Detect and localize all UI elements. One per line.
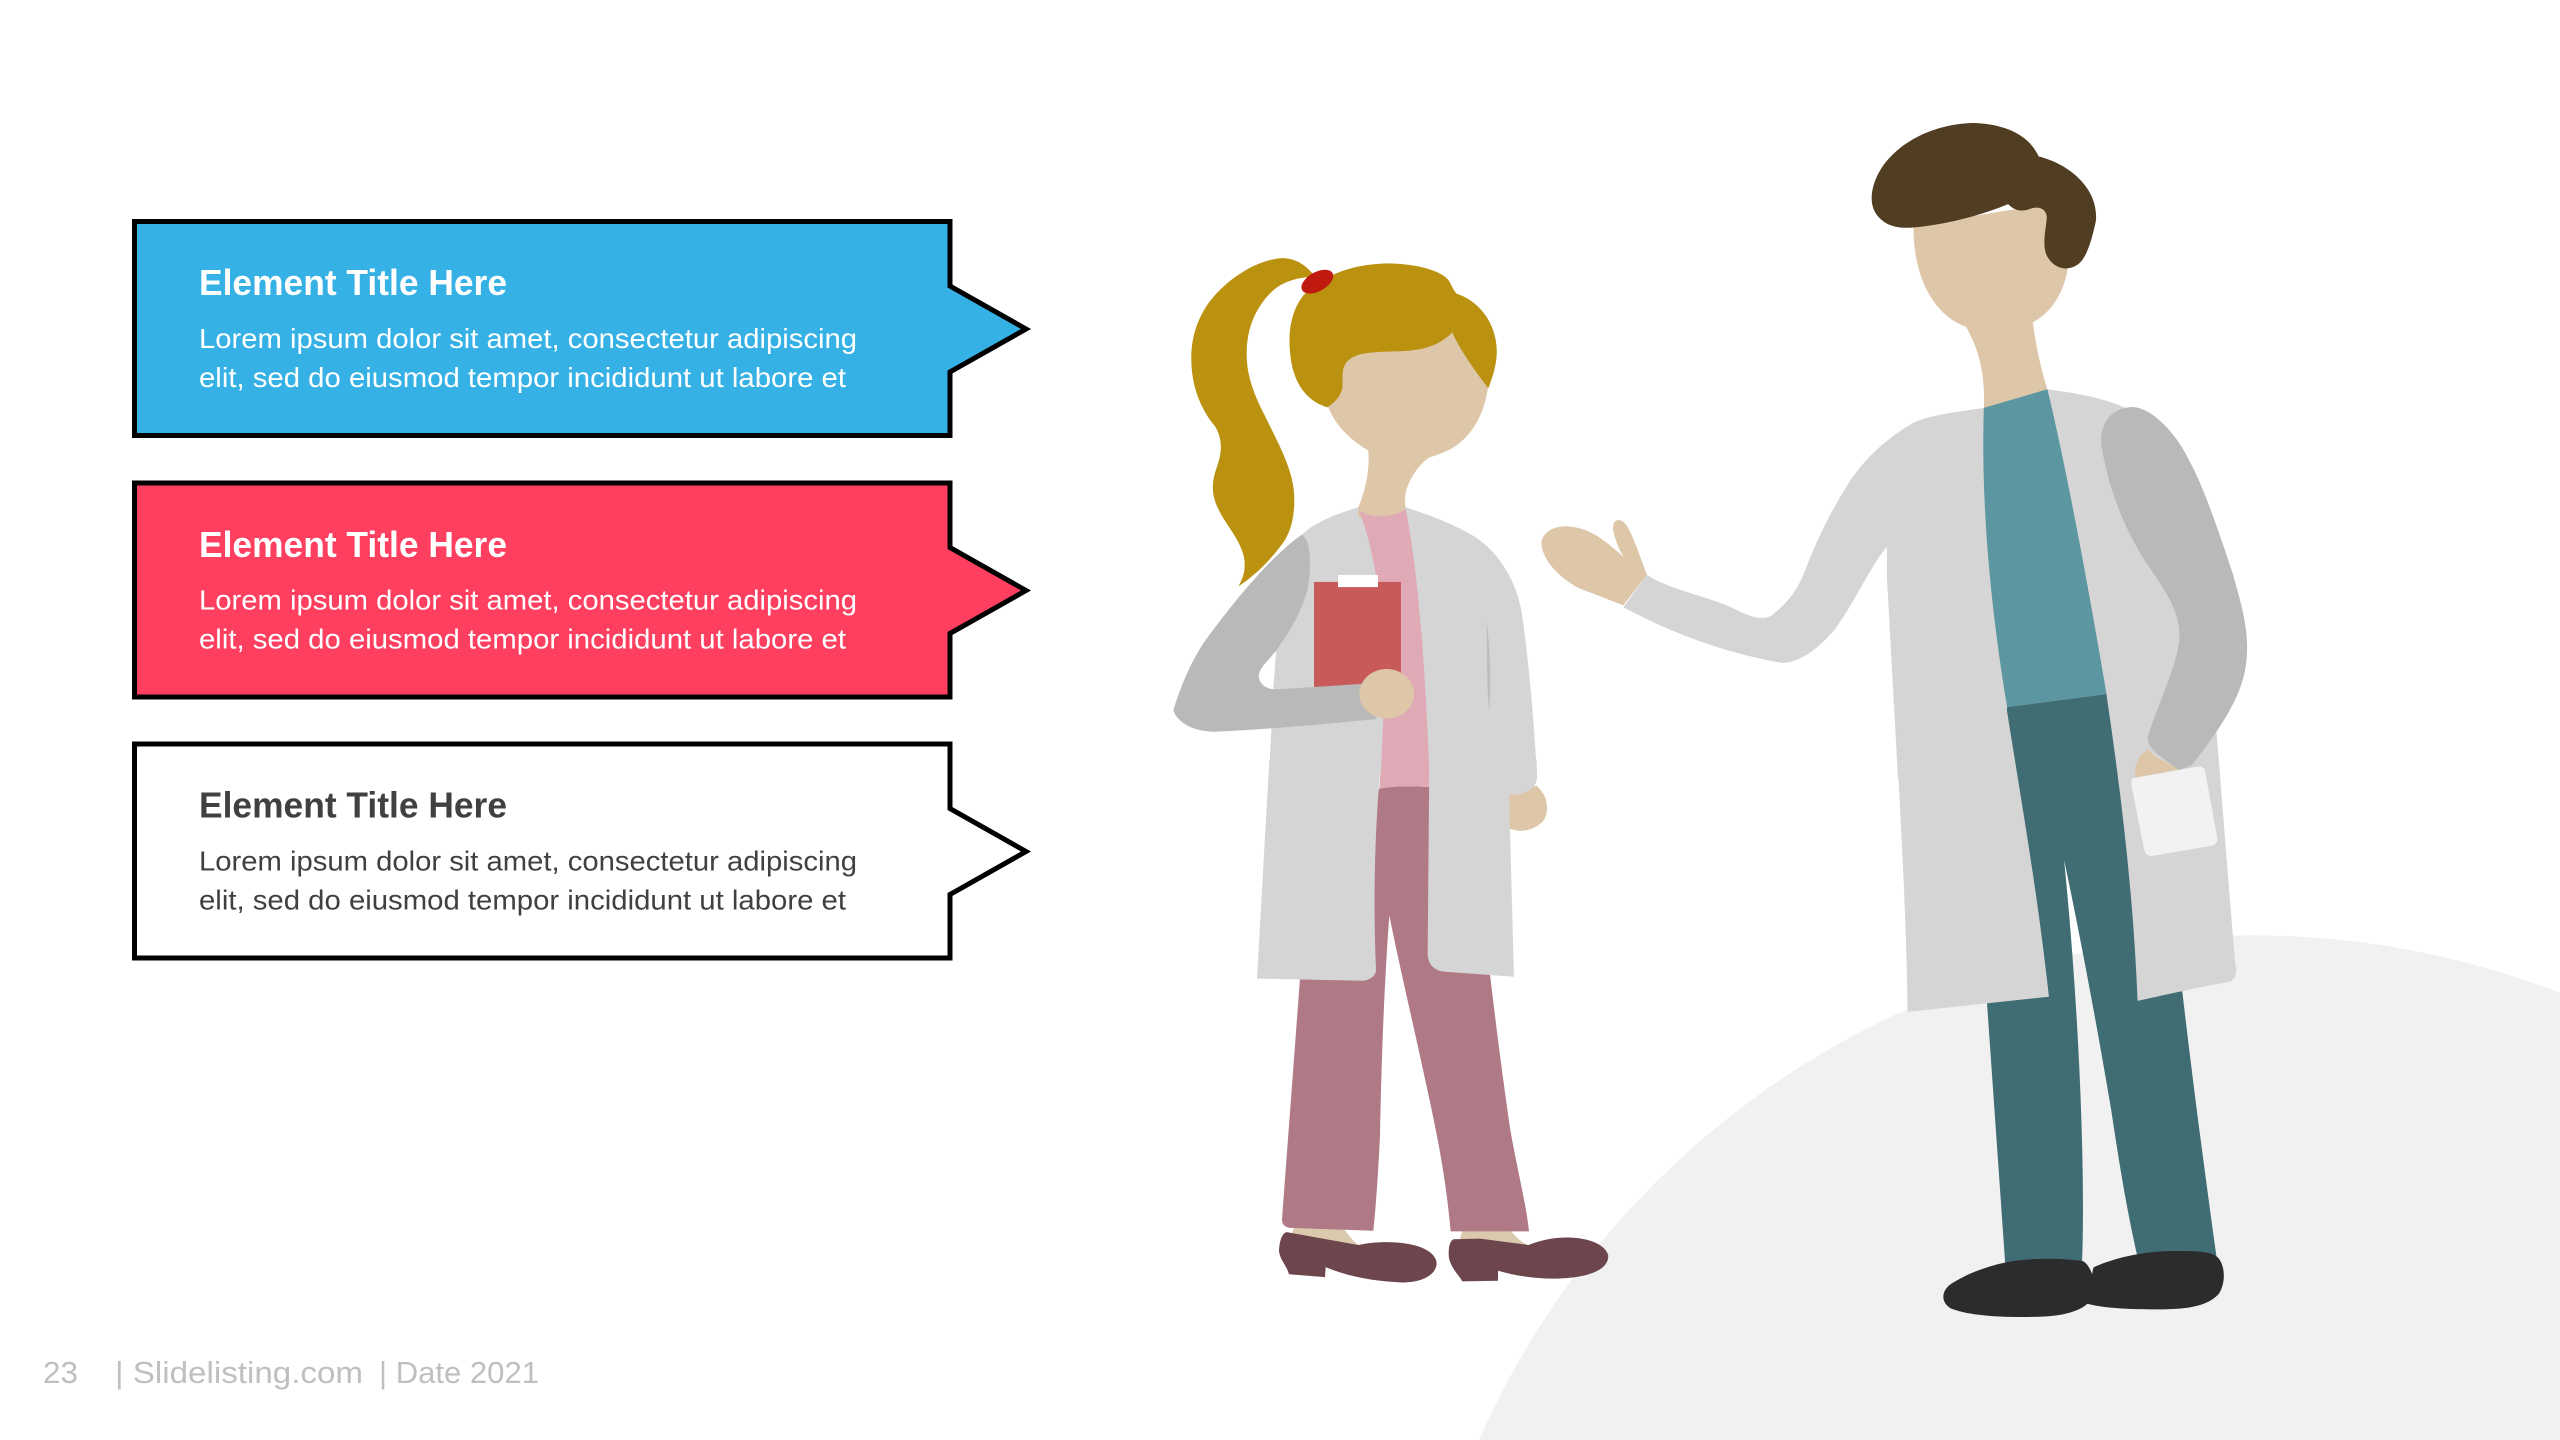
coat fold (1487, 619, 1490, 712)
man coat lower left (1895, 700, 2049, 1012)
woman coat upper (1269, 507, 1537, 770)
coat pocket (2131, 767, 2217, 856)
woman coat lower panels (1257, 760, 1537, 981)
woman lower body (1257, 760, 1608, 1282)
man raised hand (1541, 520, 1647, 605)
woman shirt (1358, 509, 1429, 770)
man upper body (1541, 123, 2242, 780)
red callout text: Lorem ipsum dolor sit amet, consectetur adipiscing (199, 584, 857, 616)
man pocket hand (2135, 749, 2180, 778)
hair band (1298, 265, 1337, 299)
white callout text: elit, sed do eiusmod tempor incididunt ut labore et (199, 884, 846, 916)
woman trousers (1282, 786, 1529, 1231)
woman lowered hand (1509, 786, 1547, 831)
woman sleeve (1173, 535, 1377, 732)
white callout text (199, 846, 857, 916)
blue callout text: elit, sed do eiusmod tempor incididunt ut labore et (199, 362, 846, 393)
man shoes (2086, 1251, 2224, 1309)
footer: 23 (43, 1355, 78, 1390)
red callout heading: Element Title Here (199, 524, 507, 565)
footer (43, 1355, 539, 1390)
man lower body (1895, 700, 2236, 1317)
red callout shape (134, 483, 1026, 697)
woman hand (1359, 669, 1414, 719)
woman hair (1289, 263, 1497, 407)
man coat and raised sleeve (1623, 389, 2242, 780)
man shirt (1983, 389, 2106, 707)
white callout text: Lorem ipsum dolor sit amet, consectetur adipiscing (199, 846, 857, 876)
blue callout text (199, 323, 857, 393)
illustration: woman doctor (1173, 258, 1608, 1282)
blue callout text: Lorem ipsum dolor sit amet, consectetur adipiscing (199, 323, 857, 354)
footer: | Slidelisting.com (115, 1355, 363, 1390)
man coat lower right (2107, 700, 2236, 1001)
panel: white callout (134, 744, 1026, 958)
woman shoes (1279, 1232, 1608, 1282)
blue callout heading: Element Title Here (199, 262, 507, 303)
man left shoe (1943, 1259, 2094, 1317)
woman ankles (1292, 1226, 1528, 1246)
man lowered sleeve (2101, 407, 2247, 770)
panel: red callout (134, 483, 1026, 697)
illustration: man doctor (1541, 123, 2247, 1317)
white callout heading: Element Title Here (199, 784, 507, 826)
ponytail (1191, 258, 1315, 586)
blue callout shape (134, 222, 1026, 436)
woman face and neck (1328, 330, 1488, 518)
panel: blue callout (134, 222, 1026, 436)
clipboard (1314, 582, 1401, 688)
red callout text: elit, sed do eiusmod tempor incididunt ut labore et (199, 624, 846, 654)
woman upper body (1173, 258, 1537, 770)
woman shirt hem (1379, 760, 1429, 789)
background hill (1479, 935, 2560, 1440)
white callout shape (134, 744, 1026, 958)
man hair (1872, 123, 2096, 268)
clipboard clip (1338, 575, 1378, 587)
footer: | Date 2021 (379, 1355, 539, 1390)
man trousers (1987, 700, 2217, 1265)
man face and neck (1914, 204, 2068, 412)
man trousers top (2007, 694, 2119, 780)
red callout text (199, 584, 857, 654)
